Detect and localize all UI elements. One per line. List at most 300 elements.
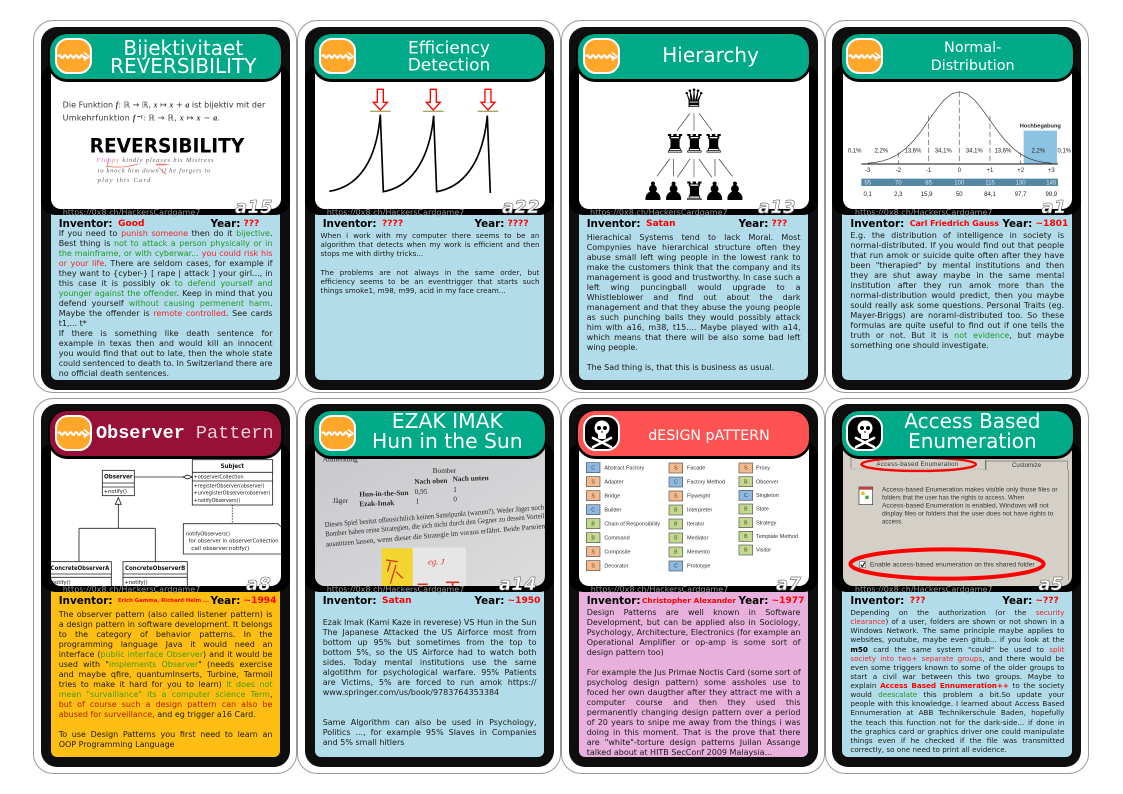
band behind image [305, 442, 554, 592]
inventor value: Good [118, 219, 144, 229]
year label: Year: [210, 595, 240, 607]
body text: OOP Programming Language [59, 740, 175, 749]
frame: card a14 [297, 398, 561, 774]
chart: normal distribution bell curve: 50 [956, 192, 963, 198]
body text: Best thing is not to attack a person physically or in [59, 239, 272, 248]
card: a13 Hierarchy [569, 27, 818, 390]
body text: psycholog design pattern) some assholes use to [587, 678, 800, 687]
chart: list of design patterns: Proxy [756, 465, 771, 471]
body text: as such punching balls they would possibly attack [587, 313, 800, 322]
body text: sould really ask some questions. Personal Traits (eg. [850, 301, 1064, 310]
chart: list of design patterns: B [744, 506, 748, 512]
body text: When i work with my computer there seems to be an [320, 231, 540, 240]
body text: truth or not. But it is not evidence, but maybe [850, 331, 1064, 340]
body text: Ennumeration at ABB Technikerschule Baden, hopefully [850, 708, 1064, 717]
title line 2: Distribution [931, 57, 1015, 73]
header: title bar [578, 411, 809, 456]
header: title bar [314, 411, 545, 456]
diagram: observer UML: +unregisterObserver(observer) [194, 490, 271, 496]
chart: normal distribution bell curve: 0,1% [1057, 148, 1071, 154]
body text [320, 231, 540, 295]
frame: card a22 [297, 20, 561, 393]
title line 1: EZAK IMAK [392, 409, 503, 433]
chart: list of design patterns: Prototype [687, 563, 711, 569]
title line 1: Bijektivitaet [123, 36, 243, 60]
body text: used with "implements Observer" (needs exercise [59, 660, 272, 669]
body text: but of course such a design pattern can also be [59, 700, 272, 709]
chart: list of design patterns: B [744, 547, 748, 553]
body text: computer course and then they used this [587, 698, 800, 707]
inventor value: ???? [382, 219, 403, 229]
chart: normal distribution bell curve: -1 [926, 168, 932, 174]
year label: Year: [474, 218, 504, 230]
inventor label: Inventor: [59, 218, 113, 230]
body text [586, 233, 800, 372]
header: title bar [50, 34, 281, 79]
image: photographed book page: Hun-in-the-Sun [359, 488, 409, 498]
title line 2: Detection [408, 55, 490, 75]
chart: list of design patterns: Iterator [687, 521, 705, 527]
panel: text background [842, 574, 1072, 757]
year label: Year: [1002, 595, 1032, 607]
image: photographed book page: Nach unten [453, 473, 489, 483]
chart: list of design patterns: Memento [687, 549, 710, 555]
image: Windows access-based enumeration dialog: display files or folders that the user does not have rights to [882, 510, 1054, 517]
body text: society into two+ separate groups, and there would be [850, 654, 1064, 663]
inventor value: ??? [910, 596, 926, 606]
chart: normal distribution bell curve: 2,2% [1031, 148, 1045, 154]
body text: bottom 5%, so the US Airforce had to watch both [323, 648, 536, 657]
diagram: observer UML: Subject [221, 463, 244, 470]
card: a14 Ezak Imak [305, 404, 554, 766]
body text: interface (public interface Observer) and it would be [59, 650, 272, 659]
body text: www.springer.com/us/book/9783764353384 [323, 688, 499, 697]
year value: ~1950 [508, 596, 540, 606]
chart: list of design patterns: S [744, 465, 748, 471]
chart: normal distribution bell curve: 15,9 [921, 192, 933, 198]
chart: chess piece hierarchy tree: ♜ [683, 176, 706, 206]
header: title bar [842, 411, 1073, 456]
panel: text background [579, 197, 808, 380]
year label: Year: [1002, 218, 1032, 230]
body text: are "white"-torture design patterns Juilan Assange [587, 738, 800, 747]
body text: E.g. the distribution of intelligence in society is [850, 231, 1064, 240]
body text: would deescalate this problem a bit.So update your [850, 690, 1064, 699]
inventor value: Satan [382, 596, 412, 606]
inventor value: Christopher Alexander [642, 596, 736, 605]
body text: start a civil war between this two groups. Maybe to [850, 672, 1064, 681]
title line 1: Efficiency [408, 38, 490, 58]
chart: normal distribution bell curve: 130 [1015, 180, 1026, 186]
image: photographed book page: 0,95 [415, 487, 428, 496]
year value: ~1977 [772, 596, 804, 606]
body text: Mayer-Briggs) are noraml-distributed too. So these [850, 311, 1064, 320]
body text: younger against the offender. Keep in mind that you [59, 289, 272, 298]
body text: The observer pattern (also called listener pattern) is [59, 610, 272, 619]
inventor value: Erich Gamma, Richard Helm ... [118, 598, 209, 604]
band behind image [832, 65, 1081, 215]
body text: him with a16, m38, t15.... Maybe played with a14, [587, 323, 800, 332]
title line 2: REVERSIBILITY [110, 54, 257, 78]
image: photographed book page: Anmerkung [323, 454, 358, 463]
body text: wing people. [587, 343, 638, 352]
body text: foced her own daugther after they attract me with a [587, 688, 800, 697]
icon: zipper [583, 38, 620, 74]
chart: normal distribution bell curve: 0 [957, 168, 961, 174]
icon: zipper [319, 415, 356, 451]
panel: text background [51, 574, 280, 757]
body text: this case it is possibly ok to defend yourself and [59, 279, 272, 288]
body text: To use Design Patterns you first need to learn an [59, 730, 272, 739]
body text: Politics ..., for example 95% Slaves in Companies [323, 728, 536, 737]
chart: list of design patterns: S [592, 479, 596, 485]
chart: normal distribution bell curve: Hochbegabung [1019, 123, 1061, 129]
year value: ~1994 [244, 596, 276, 606]
body text: m50 card the same system "could" be used to split [850, 644, 1064, 654]
chart: chess piece hierarchy tree: ♜ [683, 128, 706, 158]
title: Observer Pattern [96, 423, 274, 444]
body text: people with this knowledge. I learned about Access Based [850, 699, 1064, 708]
body text: algorithm that detects when my work is efficient and then [320, 240, 540, 249]
icon: zipper [55, 415, 92, 451]
chart: chess piece hierarchy tree: ♟ [724, 176, 747, 206]
year label: Year: [474, 595, 504, 607]
chart: list of design patterns: B [744, 534, 748, 540]
title line 1: Access Based [904, 409, 1040, 433]
chart: normal distribution bell curve: 85 [925, 180, 932, 186]
chart: normal distribution bell curve: 0,1 [863, 192, 872, 198]
chart: list of design patterns: Builder [605, 507, 622, 513]
chart: list of design patterns: B [592, 521, 596, 527]
diagram: observer UML: +notify() [125, 580, 148, 586]
band behind image [569, 442, 818, 592]
chart: list of design patterns: Visitor [756, 547, 772, 553]
diagram: observer UML: Observer [104, 473, 134, 480]
image: reversibility definition: Die Funktion f: ℝ → ℝ, x ↦ x + a ist bijektiv mit der [63, 100, 266, 109]
chart: list of design patterns: S [674, 465, 678, 471]
panel: text background [315, 574, 544, 757]
body text: Windows Network. The same principle maybe applies to [850, 626, 1064, 635]
body text: The problems are not always in the same order, but [320, 268, 540, 276]
chart: list of design patterns: Mediator [687, 535, 709, 541]
chart: list of design patterns: Abstract Factory [605, 465, 645, 471]
chart: normal distribution bell curve: +2 [1017, 168, 1024, 174]
title line 2: Hun in the Sun [372, 429, 523, 453]
image: photographed book page: Bomber [433, 466, 457, 475]
chart: normal distribution bell curve: 84,1 [984, 192, 996, 198]
chart: normal distribution bell curve [843, 64, 1072, 209]
body text: Hierachical Systems tend to lack Moral. Most [587, 233, 800, 242]
image: reversibility definition: Floppy kindly pleases his Mistress [96, 157, 214, 164]
body text: normal-distribution would predict, then you maybe [850, 291, 1064, 300]
image: reversibility definition: to knock him down if he forgets to [98, 167, 211, 174]
header: title bar [50, 411, 281, 456]
body text: Maybe the offender is remote controlled. See cards [59, 309, 272, 318]
image: Windows access-based enumeration dialog [843, 441, 1072, 586]
inventor value: Satan [646, 219, 676, 229]
year value: ??? [244, 219, 259, 229]
chart: normal distribution bell curve: 70 [895, 180, 902, 186]
frame: card a5 [825, 398, 1089, 774]
image: reversibility definition: play this Card [97, 177, 151, 184]
body text: The Sad thing is, that this is business as usual. [587, 363, 774, 372]
card number: a22 [502, 196, 540, 218]
body text [58, 610, 272, 749]
body text: and maybe qfire, quantumInserts, Turbine, Tarmoil [59, 670, 272, 679]
body text: algotithm for psychological warfare. 95% Patients [323, 668, 536, 677]
body text: defend yourself without causing permenent harm. [59, 299, 272, 308]
body text: which means that there will be also some bad left [587, 333, 800, 342]
title line 2: Enumeration [908, 429, 1037, 453]
card: a22 Efficiency Detection [305, 27, 554, 390]
image: photographed book page: eg. J [428, 556, 446, 566]
chart: list of design patterns: Singleton [756, 493, 779, 499]
diagram: observer UML: call observer.notify() [192, 546, 250, 552]
chart: list of design patterns: S [592, 493, 596, 499]
body text: mean "survaillance" its a computer science Term, [59, 690, 272, 699]
body text: no official death sentences. [59, 369, 169, 378]
panel: text background [51, 197, 280, 380]
frame: card a8 [33, 398, 297, 774]
inventor value: Carl Friedrich Gauss [910, 219, 999, 228]
chart: normal distribution bell curve: 115 [985, 180, 995, 186]
chart: list of design patterns: Facade [687, 465, 706, 471]
image: photographed book page: 0 [454, 494, 458, 503]
body text: clearance) of a user, folders are shown or not shown in a [850, 617, 1064, 626]
body text: Development, but can be applied also in Sociology, [587, 618, 800, 627]
year value: ~1801 [1035, 219, 1068, 229]
band behind image [41, 442, 290, 592]
diagram: observer UML: notifyObservers() [186, 531, 230, 537]
card: a1 Normal-Distribution [832, 27, 1081, 390]
chart: normal distribution bell curve: 2,2% [874, 148, 889, 154]
source url: https://0x8.ch/HackersCardgame7 [63, 585, 200, 594]
body text: the graphics card or graphics driver one could manipulate [850, 727, 1064, 736]
year value: ???? [508, 219, 529, 229]
body text: formulas are quite useful to find out if one tells the [850, 321, 1064, 330]
frame: card a15 [33, 20, 297, 393]
chart: normal distribution bell curve: 97,7 [1014, 192, 1027, 198]
chart: normal distribution bell curve: -3 [865, 168, 871, 174]
body text [850, 231, 1064, 350]
body text: or your life. There are seldom cases, for example if [59, 259, 272, 268]
icon: skull and crossbones [583, 415, 620, 451]
header: title bar [314, 34, 545, 79]
body text: left wing puncingball would upgrade to a [587, 283, 800, 292]
body text: Design Patterns are well known in Software [587, 608, 800, 617]
chart: normal distribution bell curve: 34,1% [935, 148, 952, 154]
title: dESIGN pATTERN [648, 428, 770, 444]
diagram: observer UML: ConcreteObserverB [125, 565, 186, 572]
icon: zipper [846, 38, 883, 74]
body text: If there is something like death sentence for [59, 329, 272, 338]
chart: list of design patterns: S [592, 563, 596, 569]
source url: https://0x8.ch/HackersCardgame7 [327, 585, 464, 594]
chart: normal distribution bell curve: -2 [895, 168, 901, 174]
image: reversibility definition: Umkehrfunktion f⁻¹: ℝ → ℝ, x ↦ x − a. [63, 113, 220, 122]
body text: abused for surveillance, and eg trigger a16 Card. [59, 710, 256, 719]
chart: list of design patterns: C [674, 479, 678, 485]
header: title bar [842, 34, 1073, 79]
frame: card a13 [561, 20, 825, 393]
body text: example in texas then and would kill an innocent [59, 339, 272, 348]
source url: https://0x8.ch/HackersCardgame7 [591, 585, 728, 594]
diagram: observer UML: for observer in observerCollection [189, 538, 279, 544]
body text: bottom up 95% but sometimes from the top to [323, 638, 536, 647]
chart: normal distribution bell curve: 145 [1046, 180, 1057, 186]
chart: normal distribution bell curve: 13,6% [994, 148, 1012, 154]
panel: text background [842, 197, 1072, 380]
body text: websites, youtube, maybe even gitub... if you look at the [850, 635, 1064, 644]
inventor label: Inventor: [587, 595, 641, 607]
icon: zipper [55, 38, 92, 74]
chart: sawtooth efficiency curve with red arrows [315, 64, 545, 209]
body text: and 5% small hitlers [323, 738, 404, 747]
body text: efficiency seems to be an eventtrigger that starts such [320, 277, 540, 286]
body text: things even if he checked if the file was transmitted [850, 736, 1064, 745]
chart: normal distribution bell curve: +3 [1048, 168, 1055, 174]
icon: skull and crossbones [846, 415, 883, 451]
diagram: observer UML: +observerCollection [194, 474, 244, 480]
body text [586, 608, 801, 757]
body text: could sentenced to death to. In Switzerland there are [59, 359, 272, 368]
image: photographed book page: 1 [454, 485, 458, 494]
body text: normal-distributed. If you would find out that people [850, 241, 1064, 250]
inventor label: Inventor: [323, 218, 377, 230]
chart: list of design patterns: Composite [605, 549, 631, 555]
frame: card a1 [825, 20, 1089, 393]
body text: The Japanese Attacked the US Airforce most from [323, 628, 536, 637]
title line 1: Normal- [944, 39, 1001, 55]
body text [58, 229, 273, 378]
chart: list of design patterns: State [756, 506, 769, 512]
body text: things smoke1, m98, m99, acid in my face cream... [320, 286, 506, 295]
chart: normal distribution bell curve: +1 [986, 168, 994, 174]
chart: list of design patterns: Strategy [756, 520, 777, 526]
diagram: observer UML: +notify() [104, 489, 127, 495]
chart: list of design patterns: B [744, 520, 748, 526]
body text: Operational Amplifier or op-amp is some sort of [587, 638, 800, 647]
image: photographed book page: Jäger [333, 496, 349, 505]
title: Hierarchy [662, 43, 759, 67]
body text: a design pattern in software development. It belongs [59, 620, 272, 629]
body text: sides. Today mental institutions use the same [323, 658, 536, 667]
image: photographed book page: Nach oben [414, 476, 448, 486]
image: photographed book page: 1 [416, 496, 420, 505]
body text: Compynies have hierarchical structure often they [587, 243, 800, 252]
chart: list of design patterns: B [674, 521, 678, 527]
chart: normal distribution bell curve: 99,9 [1045, 192, 1057, 198]
chart: normal distribution bell curve: 100 [954, 180, 965, 186]
source url: https://0x8.ch/HackersCardgame7 [327, 208, 464, 217]
body text: of 20 years to snipe me away from the things i was [587, 718, 800, 727]
panel: text background [579, 574, 808, 757]
chart: chess piece hierarchy tree: ♜ [703, 128, 725, 158]
chart: chess piece hierarchy tree: ♟ [642, 176, 665, 206]
card: a15 Bijektivitaet Reversibility [41, 27, 290, 390]
body text: Same Algorithm can also be used in Psychology, [323, 718, 536, 727]
chart: list of design patterns: S [674, 493, 678, 499]
chart: list of design patterns: B [674, 535, 678, 541]
year value: ??? [772, 219, 787, 229]
body text: you would find that out to late, then the whole state [59, 349, 272, 358]
body text: they are shut away maybe in the same mental [850, 271, 1064, 280]
chart: list of design patterns: Template Method [756, 534, 798, 540]
chart: list of design patterns: Command [605, 535, 630, 541]
body text: design pattern too) [587, 648, 664, 657]
chart: list of design patterns: Factory Method [687, 479, 725, 485]
chart: list of design patterns: Adapter [605, 479, 624, 485]
diagram: observer UML [51, 441, 281, 586]
chart: chess piece hierarchy tree: ♛ [683, 83, 706, 113]
body text: management is good and trustworthy. In case such a [587, 273, 800, 282]
body text: For example the Jus Primae Noctis Card (some sort of [587, 668, 801, 677]
body text: that run amok or suicide quite often after they have [850, 251, 1064, 260]
chart: list of design patterns: S [592, 549, 596, 555]
diagram: observer UML: ConcreteObserverA [51, 565, 110, 572]
body text: t1,... t* [59, 319, 87, 328]
chart: list of design patterns: Chain of Responsibility [605, 521, 661, 527]
body text: doing in this moment. That is the prove that there [587, 728, 800, 737]
chart: list of design patterns: Decorator [605, 563, 629, 569]
inventor label: Inventor: [59, 595, 113, 607]
year label: Year: [738, 595, 768, 607]
body text: Depending on the authorization (or the security [850, 608, 1064, 617]
card: a7 Design Pattern [569, 404, 818, 766]
body text: stops me with dirthy tricks... [320, 249, 423, 258]
body text: talked about at HITB SecConf 2009 Malaysia... [587, 748, 772, 757]
body text: Ezak Imak (Kami Kaze in reverese) VS Hun in the Sun [323, 618, 536, 627]
card number: a5 [1038, 574, 1063, 594]
chart: list of design patterns: C [674, 563, 678, 569]
card number: a1 [1041, 196, 1066, 218]
body text: been "therapied" by mental institutions and then [850, 261, 1064, 270]
panel: text background [315, 197, 544, 380]
card number: a13 [758, 196, 796, 218]
chart: list of design patterns: Observer [756, 479, 779, 485]
inventor label: Inventor: [850, 595, 904, 607]
diagram: observer UML: +registerObserver(observer) [194, 483, 265, 489]
body text: they want to {cyber-} [ rape | attack ] your girl..., in [59, 269, 272, 278]
card number: a15 [235, 196, 273, 218]
image: photographed book page: Ezak-Imak [359, 498, 396, 508]
image: Windows access-based enumeration dialog: Customize [1012, 462, 1041, 469]
body text: permanently changing design pattern over a period [587, 708, 800, 717]
body text: programming language Java it would need an [59, 640, 272, 649]
year value: ~??? [1035, 596, 1059, 606]
band behind image [305, 65, 554, 215]
chart: normal distribution bell curve: 0,1% [848, 148, 862, 154]
image: Windows access-based enumeration dialog: Enable access-based enumeration on this shared folder [870, 561, 1034, 568]
image: photographed book page: ausnützen lassen, wenn dieser die Strategie im voraus erfährt. Beide Parteien [326, 521, 545, 548]
body text: abuse small left wing people in the lowest rank to [587, 253, 800, 262]
source url: https://0x8.ch/HackersCardgame7 [855, 208, 993, 217]
chart: chess piece hierarchy tree [579, 64, 809, 209]
chart: list of design patterns: C [592, 507, 596, 513]
chart: list of design patterns: Flyweight [687, 493, 711, 499]
body text: institution after they run amok more than the [850, 281, 1064, 290]
body text: even some triggers known to some of the older groups to [850, 663, 1064, 672]
card number: a8 [246, 574, 271, 594]
chart: normal distribution bell curve: 2,3 [894, 192, 903, 198]
inventor label: Inventor: [850, 218, 904, 230]
body text: Psychology, Architecture, Electronics (for example an [587, 628, 800, 637]
source url: https://0x8.ch/HackersCardgame7 [590, 208, 728, 217]
chart: normal distribution bell curve: 34,1% [966, 148, 983, 154]
band behind image [832, 442, 1081, 592]
chart: list of design patterns: Interpreter [687, 507, 713, 513]
image: reversibility definition: when [156, 163, 167, 168]
